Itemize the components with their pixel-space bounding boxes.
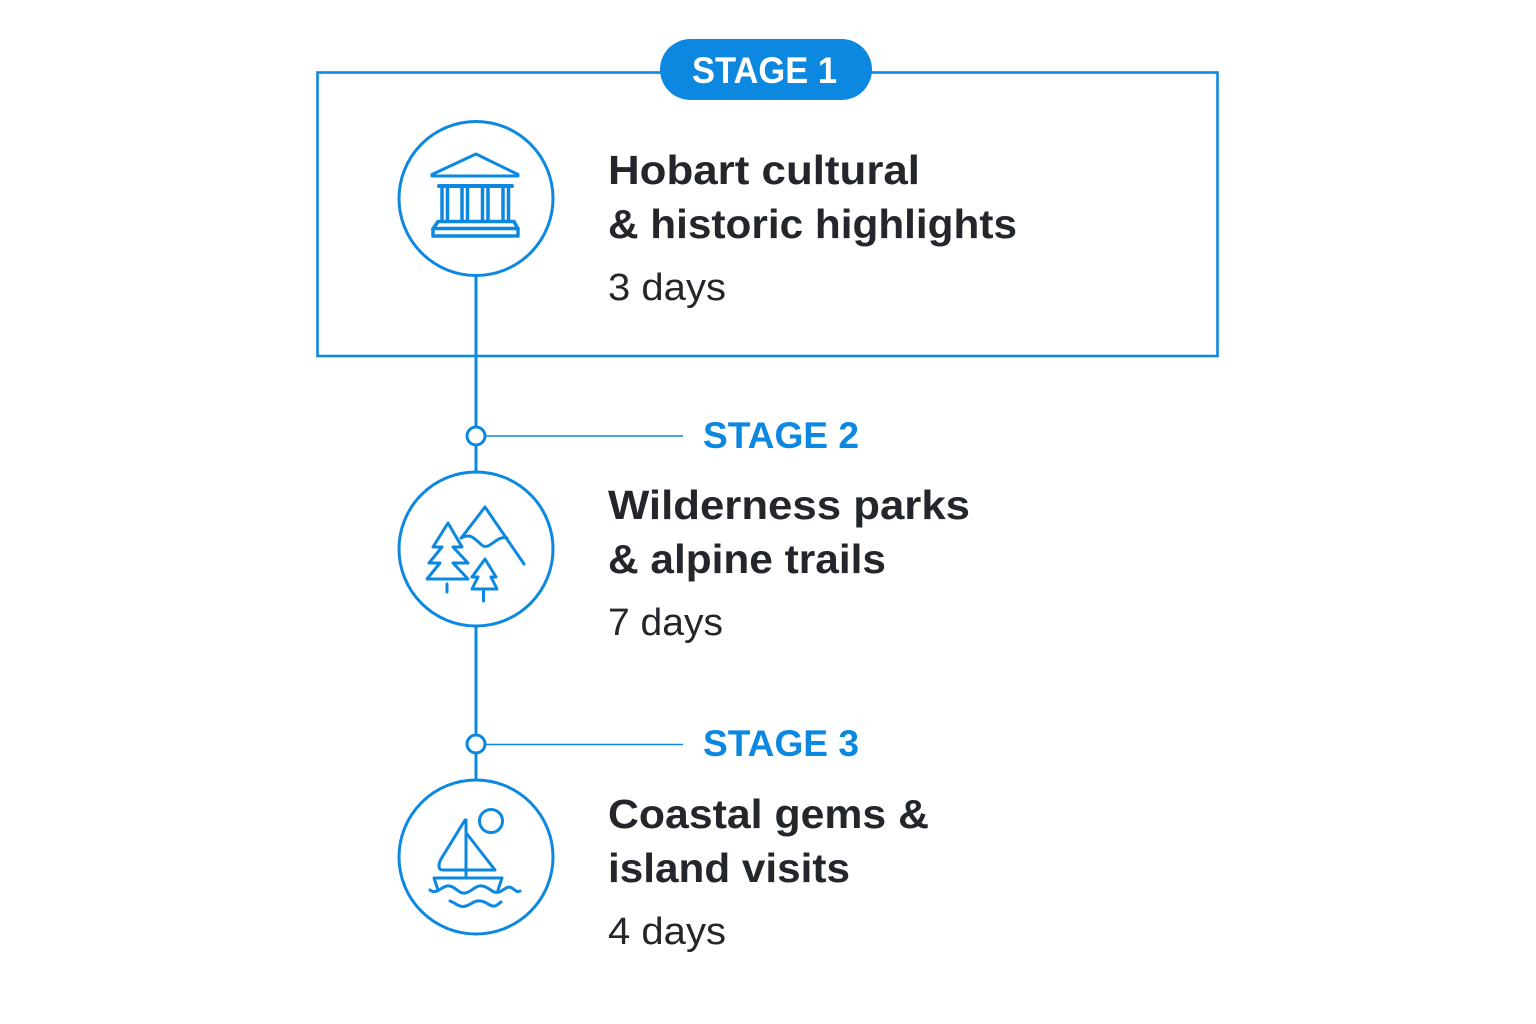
text: stage 2 details: & alpine trails xyxy=(608,536,886,582)
text: stage 1 details: Hobart cultural xyxy=(608,147,920,193)
marker: stage 3 xyxy=(467,735,683,753)
text: stage 1 details: & historic highlights xyxy=(608,201,1017,247)
text: stage 2 details: Wilderness parks xyxy=(608,482,970,528)
panel: stage 1 frame xyxy=(318,72,1218,356)
icon: museum in circle xyxy=(399,122,553,276)
text: stage 2 details: 7 days xyxy=(608,602,723,644)
text: stage 2 details xyxy=(608,482,970,644)
icon: mountains and trees in circle xyxy=(399,472,553,626)
label: stage 2: STAGE 2 xyxy=(703,415,859,456)
text: stage 1 details xyxy=(608,147,1017,309)
text: stage 3 details: island visits xyxy=(608,845,850,891)
text: stage 3 details xyxy=(608,791,929,953)
label: stage 3: STAGE 3 xyxy=(703,723,859,764)
text: stage 3 details: 4 days xyxy=(608,911,726,953)
badge: stage 1: STAGE 1 xyxy=(692,50,837,91)
badge: stage 1 xyxy=(660,39,872,100)
text: stage 3 details: Coastal gems & xyxy=(608,791,929,837)
text: stage 1 details: 3 days xyxy=(608,267,726,309)
marker: stage 2 xyxy=(467,427,683,445)
icon: sailboat in circle xyxy=(399,780,553,934)
timeline connector xyxy=(474,270,478,790)
